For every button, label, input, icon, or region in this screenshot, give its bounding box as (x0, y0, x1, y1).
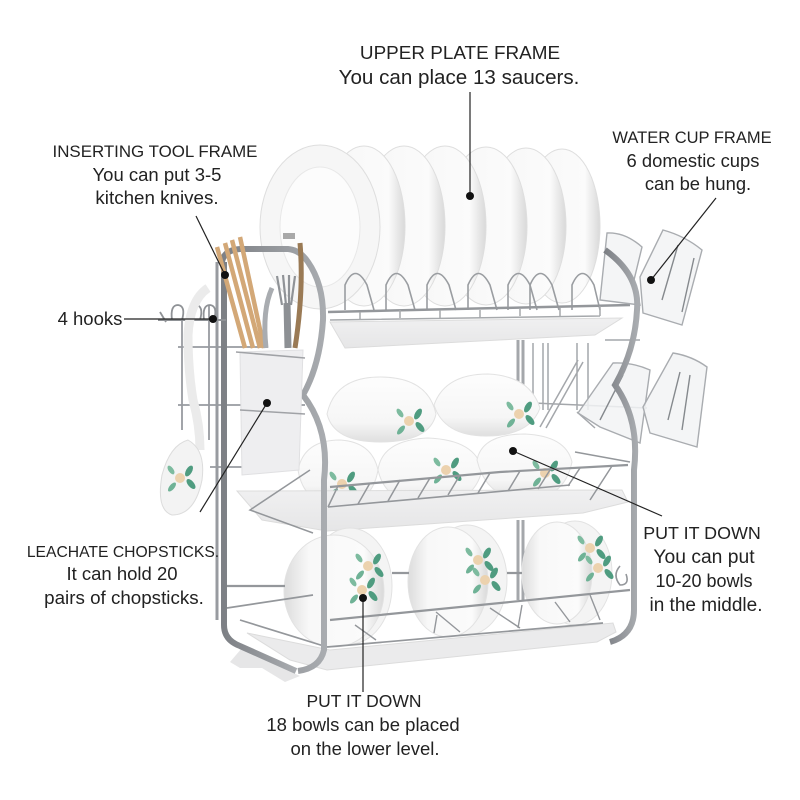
label: put it down middle: You can put (653, 547, 755, 568)
label: water cup frame: WATER CUP FRAME (612, 129, 772, 147)
label: put it down middle: in the middle. (649, 595, 763, 616)
middle shelf tray (237, 490, 628, 531)
knives and chopsticks (217, 237, 301, 348)
label: water cup frame: 6 domestic cups (627, 150, 759, 171)
label: put it down middle: 10-20 bowls (655, 571, 753, 591)
label: put it down lower: PUT IT DOWN (306, 691, 422, 711)
label: inserting tool frame: INSERTING TOOL FRAME (53, 142, 257, 161)
label: upper plate frame: You can place 13 saucers. (339, 66, 579, 89)
hanging spoon and hooks (158, 288, 226, 515)
left basket wires and posts (178, 262, 305, 620)
upper plates (260, 145, 600, 309)
lower bowl flowers (348, 534, 615, 605)
label: upper plate frame: UPPER PLATE FRAME (360, 43, 560, 64)
lower wire basket (227, 566, 630, 647)
label: leachate chopsticks: LEACHATE CHOPSTICKS. (27, 544, 219, 561)
label: put it down lower: 18 bowls can be placed (266, 714, 460, 735)
label: inserting tool frame: kitchen knives. (95, 187, 219, 208)
label: inserting tool frame: You can put 3-5 (93, 164, 221, 185)
back posts and basket wires (518, 340, 647, 600)
middle bowls (298, 374, 572, 505)
plate support arches (345, 274, 600, 310)
lower bowls (284, 521, 612, 647)
label: 4 hooks: 4 hooks (58, 308, 122, 329)
middle wire basket (250, 452, 630, 533)
lower shelf tray (247, 623, 616, 670)
label: leachate chopsticks: It can hold 20 (66, 563, 178, 584)
leader lines with dots (124, 92, 716, 692)
label: put it down middle: PUT IT DOWN (643, 523, 761, 543)
label: water cup frame: can be hung. (645, 173, 751, 194)
label: leachate chopsticks: pairs of chopsticks. (44, 587, 204, 608)
label: put it down lower: on the lower level. (290, 738, 440, 759)
water cups (578, 230, 707, 447)
spoon flower (166, 464, 197, 493)
tray feet (230, 648, 300, 682)
middle bowl flowers (328, 400, 562, 499)
upper plate stamp (283, 233, 295, 239)
upper shelf tray and wire (328, 305, 630, 348)
chopstick holder (236, 350, 305, 475)
chrome frame (222, 249, 637, 671)
